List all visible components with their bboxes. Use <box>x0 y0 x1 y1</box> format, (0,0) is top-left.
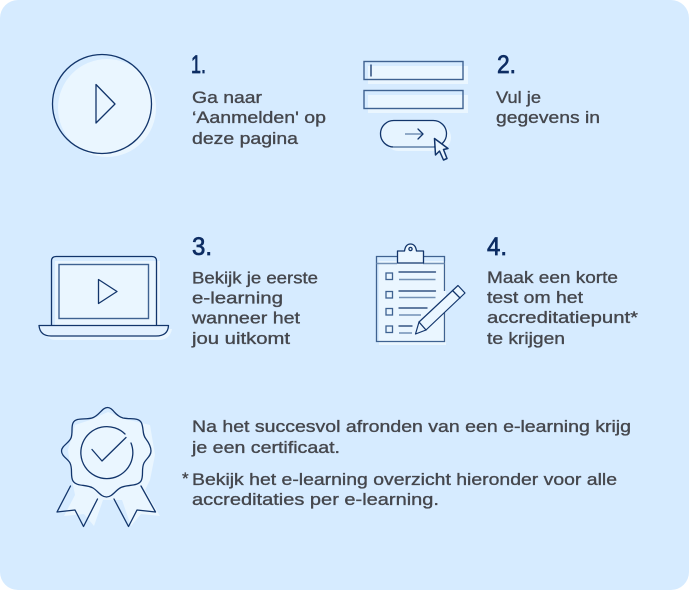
icon: laptop with video <box>39 256 172 340</box>
step 4 text: 4. <box>487 233 507 261</box>
step 3 text: wanneer het <box>191 308 300 328</box>
step 3 text: Bekijk je eerste <box>192 268 318 288</box>
step 1 text: Ga naar <box>192 88 262 107</box>
closing note text: Bekijk het e-learning overzicht hieronder voor alle <box>192 470 617 489</box>
step 4 text: Maak een korte <box>487 268 618 287</box>
step 4 text: test om het <box>487 288 583 307</box>
step 3 text <box>191 233 318 348</box>
step 3 text: e-learning <box>192 288 283 308</box>
icon: award rosette with check <box>57 408 160 526</box>
step 4 text: accreditatiepunt* <box>487 308 638 327</box>
step 1 text: ‘Aanmelden' op <box>192 108 326 127</box>
icon: play button circle <box>52 54 156 157</box>
step 1 text: 1. <box>191 51 206 79</box>
step 1 text: deze pagina <box>192 129 299 148</box>
closing note text <box>182 417 631 509</box>
step 2 text <box>496 51 600 127</box>
step 3 text: 3. <box>192 233 212 261</box>
step 4 text: te krijgen <box>487 329 565 348</box>
closing note text: * <box>182 469 189 488</box>
closing note text: je een certificaat. <box>191 438 340 457</box>
step 2 text: gegevens in <box>496 108 600 127</box>
icon: clipboard checklist with pencil <box>376 244 465 345</box>
step 2 text: Vul je <box>496 88 541 107</box>
step 2 text: 2. <box>497 51 516 79</box>
step 4 text <box>487 233 638 348</box>
step 3 text: jou uitkomt <box>191 329 290 348</box>
closing note text: accreditaties per e-learning. <box>192 490 439 509</box>
icon: form with button and cursor <box>364 62 468 160</box>
step 1 text <box>191 51 326 148</box>
closing note text: Na het succesvol afronden van een e-learning krijg <box>192 417 631 436</box>
